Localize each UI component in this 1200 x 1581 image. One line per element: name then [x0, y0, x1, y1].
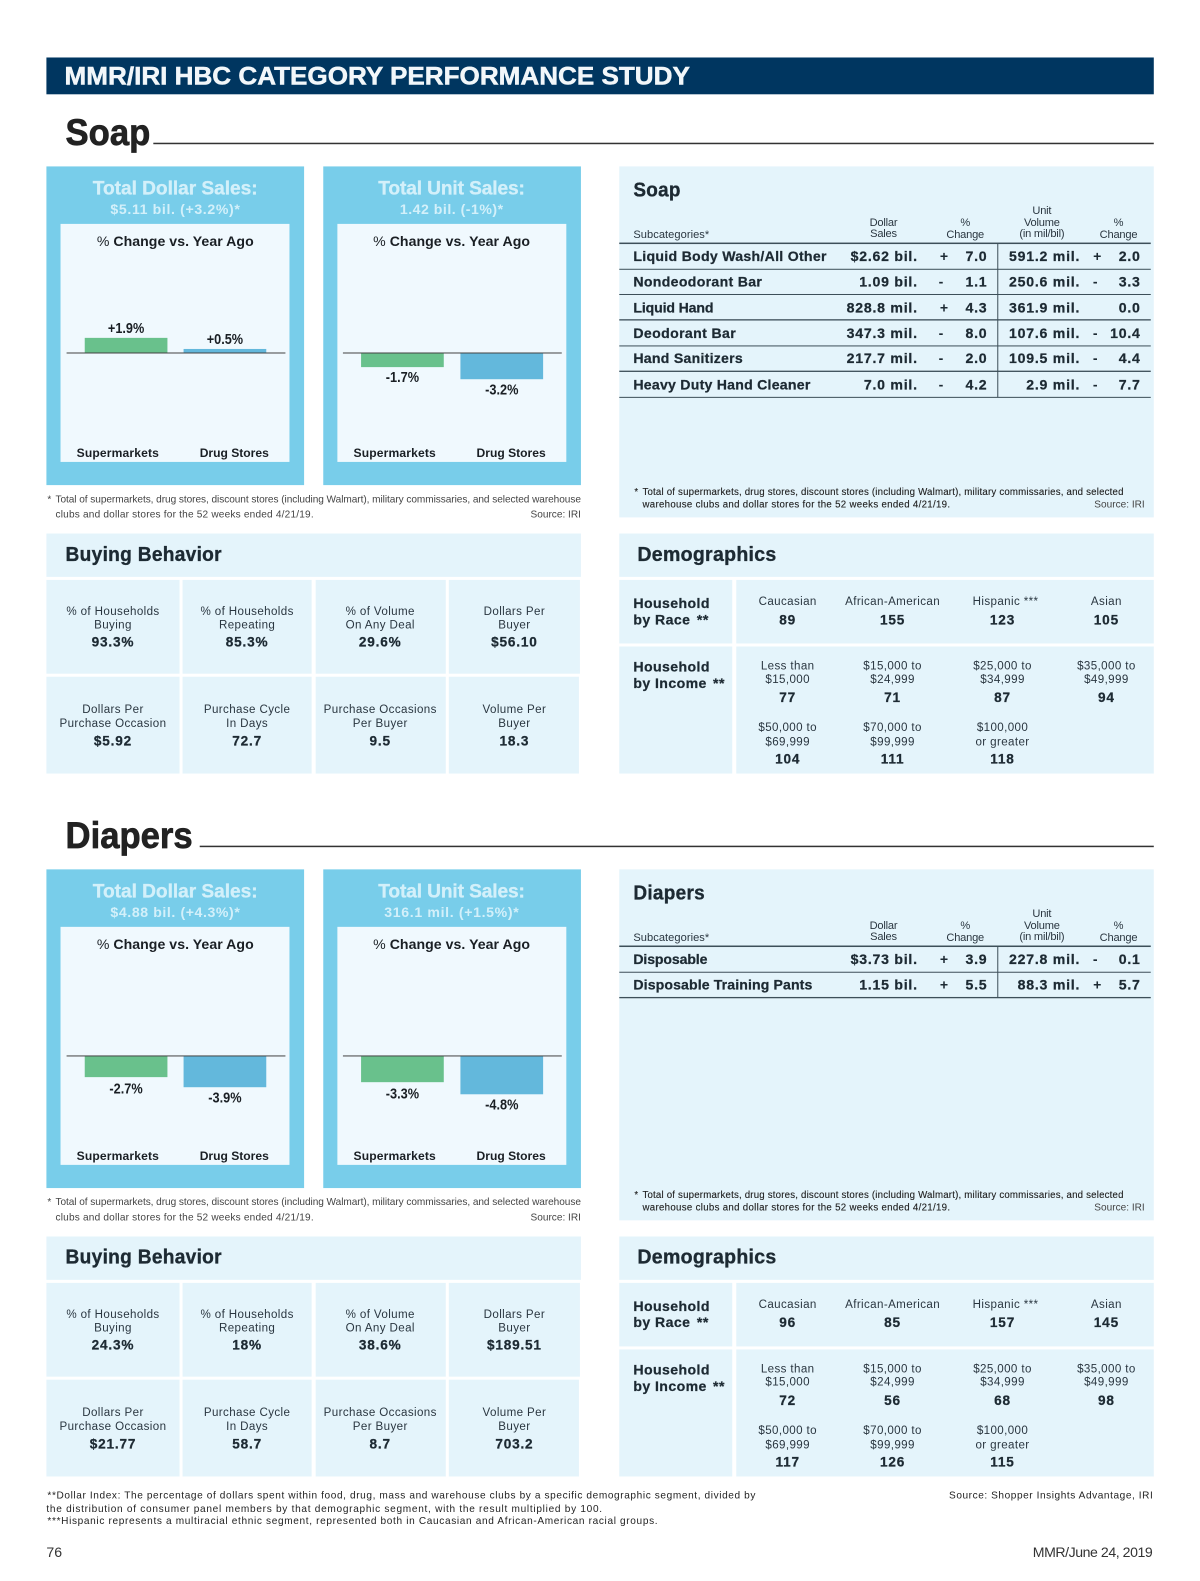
table column headers: % — [1114, 920, 1124, 932]
table column headers: Dollar — [870, 217, 898, 229]
metric cells: Per Buyer — [353, 1421, 408, 1433]
subheading: diapers unit sales value: 316.1 mil. (+1.5%)* — [384, 904, 519, 920]
bar chart: soap dollar sales: +0.5% — [207, 331, 244, 348]
table column headers: Sales — [870, 931, 898, 943]
household by income: 71 — [884, 690, 901, 705]
footnote: soap sales: Total of supermarkets, drug stores, discount stores (including Walmart), military commissaries, and selected warehouse — [55, 494, 581, 505]
household by race: 157 — [990, 1315, 1015, 1330]
household by income: $70,000 to — [863, 1425, 922, 1437]
table rows: 88.3 mil. — [1018, 976, 1080, 992]
household by income: $70,000 to — [863, 722, 922, 734]
metric cells: 29.6% — [359, 634, 402, 649]
table rows: 0.1 — [1119, 951, 1141, 967]
table rows: Disposable Training Pants — [633, 976, 813, 992]
table footnote: Source: IRI — [1094, 499, 1145, 510]
heading: total unit sales: Total Unit Sales: — [378, 179, 525, 200]
household by income: 98 — [1098, 1393, 1115, 1408]
household by income: 56 — [884, 1393, 901, 1408]
metric cells: Buying — [94, 1322, 132, 1334]
panel: soap demographics — [619, 534, 1154, 774]
section title: Soap: Soap — [66, 111, 150, 153]
metric cells: In Days — [226, 1421, 268, 1433]
source credit: Source: Shopper Insights Advantage, IRI — [949, 1491, 1153, 1502]
panel: diapers buying behavior — [46, 1236, 581, 1477]
household by income: $24,999 — [870, 1377, 915, 1389]
heading: total unit sales: Total Unit Sales: — [378, 882, 525, 903]
household by income: or greater — [975, 1439, 1030, 1451]
table rows: 591.2 mil. — [1009, 248, 1080, 264]
table rows: + — [940, 248, 948, 264]
metric cells: % of Volume — [346, 1309, 415, 1321]
household by race — [619, 580, 1154, 643]
household by income: Less than — [761, 661, 815, 673]
table rows: 2.0 — [1119, 248, 1141, 264]
household by income: $49,999 — [1084, 1377, 1129, 1389]
table rows: + — [940, 976, 948, 992]
metric cells: $21.77 — [90, 1436, 136, 1451]
table rows: 10.4 — [1110, 325, 1141, 341]
footnote: soap sales: Source: IRI — [531, 509, 581, 520]
table rows: 1.1 — [965, 273, 987, 289]
table rows: - — [1093, 951, 1098, 967]
metric cells — [46, 1283, 580, 1477]
household by income: 115 — [990, 1454, 1015, 1469]
table rows: 361.9 mil. — [1009, 300, 1080, 316]
page number: 76 — [46, 1544, 62, 1560]
issue date: MMR/June 24, 2019 — [1033, 1544, 1153, 1560]
household by income: $25,000 to — [973, 1364, 1032, 1376]
table column headers: % — [1114, 217, 1124, 229]
table rows: - — [939, 325, 944, 341]
household by income: $49,999 — [1084, 674, 1129, 686]
bar chart: soap unit sales: -3.2% — [485, 381, 519, 398]
metric cells: 24.3% — [92, 1337, 134, 1352]
footnote: diapers sales — [47, 1197, 581, 1223]
metric cells: Volume Per — [483, 704, 546, 716]
metric cells: % of Volume — [346, 606, 415, 618]
household by income: 118 — [990, 751, 1015, 766]
table column headers: (in mil/bil) — [1019, 228, 1064, 240]
table column headers — [633, 908, 1137, 944]
heading: demographics: Demographics — [637, 1247, 777, 1269]
household by race: Asian — [1091, 596, 1122, 608]
panel: diapers total unit sales — [323, 869, 581, 1188]
metric cells: Repeating — [219, 1322, 275, 1334]
table footnote: warehouse clubs and dollar stores for the 52 weeks ended 4/21/19. — [641, 499, 950, 510]
metric cells: 93.3% — [92, 634, 134, 649]
household by income: $25,000 to — [973, 661, 1032, 673]
panel: soap subcategory table — [619, 166, 1154, 517]
household by race: 145 — [1094, 1315, 1119, 1330]
household by race: Hispanic *** — [973, 596, 1039, 608]
panel: soap buying behavior — [46, 534, 581, 774]
heading: buying behavior: Buying Behavior — [66, 1247, 222, 1269]
table rows: 347.3 mil. — [847, 325, 918, 341]
table rows: - — [1093, 350, 1098, 366]
household by race: Hispanic *** — [973, 1299, 1039, 1311]
metric cells: Purchase Cycle — [204, 704, 290, 716]
household by income: $100,000 — [977, 1425, 1028, 1437]
household by income: $69,999 — [765, 736, 810, 748]
table rows: $3.73 bil. — [851, 951, 918, 967]
table rows: 227.8 mil. — [1009, 951, 1080, 967]
heading: demographics: Demographics — [637, 544, 777, 566]
metric cells: 9.5 — [370, 733, 391, 748]
bar chart: soap dollar sales: +1.9% — [108, 320, 145, 337]
metric cells: Buying — [94, 619, 132, 631]
chart title: % Change vs. Year Ago — [373, 233, 531, 249]
table rows: 109.5 mil. — [1009, 350, 1080, 366]
metric cells: 38.6% — [359, 1337, 402, 1352]
household by income: ** — [713, 1378, 725, 1394]
table footnote: Total of supermarkets, drug stores, discount stores (including Walmart), military commissaries, and selected — [642, 487, 1124, 498]
bar chart: diapers dollar sales: Drug Stores — [200, 1149, 269, 1163]
table footnote: Total of supermarkets, drug stores, discount stores (including Walmart), military commissaries, and selected — [642, 1190, 1124, 1201]
table column headers: Volume — [1024, 217, 1060, 229]
household by race: Caucasian — [759, 1299, 817, 1311]
table rows — [619, 243, 1151, 398]
metric cells: 72.7 — [232, 733, 262, 748]
household by race: African-American — [845, 596, 940, 608]
table rows: 4.4 — [1119, 350, 1141, 366]
metric cells: Dollars Per — [82, 704, 144, 716]
table rows — [619, 946, 1151, 998]
household by race: Asian — [1091, 1299, 1122, 1311]
bar chart: diapers unit sales: -4.8% — [485, 1096, 519, 1113]
footnote: diapers sales: clubs and dollar stores for the 52 weeks ended 4/21/19. — [55, 1212, 314, 1223]
household by race: 123 — [990, 612, 1015, 627]
bar chart: soap dollar sales — [67, 320, 285, 460]
metric cells: % of Households — [66, 606, 160, 618]
table rows: 3.3 — [1119, 273, 1141, 289]
table rows: 1.15 bil. — [859, 976, 918, 992]
household by income: $99,999 — [870, 1439, 915, 1451]
household by income — [619, 646, 1154, 774]
metric cells: $189.51 — [487, 1337, 542, 1352]
footnote: soap sales — [47, 494, 581, 520]
table rows: 250.6 mil. — [1009, 273, 1080, 289]
metric cells: 8.7 — [370, 1436, 391, 1451]
table rows: + — [1093, 976, 1101, 992]
footnote: soap sales: * — [47, 494, 51, 505]
table rows: Hand Sanitizers — [633, 350, 743, 366]
household by income: $34,999 — [980, 674, 1025, 686]
household by income: $69,999 — [765, 1439, 810, 1451]
household by income: 111 — [881, 751, 904, 766]
table footnote: * — [634, 1190, 638, 1201]
household by income: Household — [633, 1362, 710, 1378]
table rows: 2.0 — [965, 350, 987, 366]
bar chart: diapers unit sales: -3.3% — [386, 1085, 420, 1102]
household by income: 104 — [775, 751, 800, 766]
metric cells: % of Households — [66, 1309, 160, 1321]
metric cells: 85.3% — [226, 634, 268, 649]
metric cells: Purchase Cycle — [204, 1407, 290, 1419]
bar chart: soap dollar sales: Drug Stores — [200, 446, 269, 460]
table rows: 5.5 — [965, 976, 987, 992]
household by race: 96 — [779, 1315, 796, 1330]
table rows: 4.3 — [965, 300, 987, 316]
heading: total dollar sales: Total Dollar Sales: — [93, 179, 258, 200]
household by income: ** — [713, 675, 725, 691]
table rows: - — [1093, 376, 1098, 392]
table column headers: % — [960, 217, 970, 229]
bar chart: diapers dollar sales: -3.9% — [208, 1089, 242, 1106]
subheading: soap unit sales value: 1.42 bil. (-1%)* — [400, 201, 504, 217]
household by income: 77 — [779, 690, 796, 705]
metric cells: Purchase Occasion — [60, 718, 166, 730]
footnote: diapers sales: * — [47, 1197, 51, 1208]
panel: diapers demographics — [619, 1236, 1154, 1477]
metric cells: $56.10 — [491, 634, 538, 649]
table rows: 107.6 mil. — [1009, 325, 1080, 341]
metric cells: 18.3 — [500, 733, 529, 748]
footnote: diapers sales: Source: IRI — [531, 1212, 581, 1223]
bar chart: soap unit sales: Drug Stores — [477, 446, 546, 460]
panel: soap total dollar sales — [46, 166, 304, 485]
table rows: 8.0 — [965, 325, 987, 341]
bar chart: soap dollar sales: Supermarkets — [77, 446, 159, 460]
household by income: 117 — [775, 1454, 800, 1469]
table rows: + — [940, 300, 948, 316]
section title: Diapers: Diapers — [66, 814, 193, 856]
table rows: 217.7 mil. — [847, 350, 918, 366]
metric cells: Dollars Per — [484, 606, 545, 618]
household by race: 85 — [884, 1315, 901, 1330]
household by income: $99,999 — [870, 736, 915, 748]
metric cells: % of Households — [200, 1309, 294, 1321]
bar chart: diapers unit sales: Supermarkets — [354, 1149, 436, 1163]
table rows: - — [1093, 325, 1098, 341]
household by income: $24,999 — [870, 674, 915, 686]
table rows: Disposable — [633, 951, 708, 967]
bar chart: soap unit sales: Supermarkets — [354, 446, 436, 460]
table rows: + — [940, 951, 948, 967]
household by income: $15,000 — [765, 674, 810, 686]
household by income: $35,000 to — [1077, 661, 1136, 673]
table rows: 7.7 — [1119, 376, 1141, 392]
metric cells: 58.7 — [232, 1436, 262, 1451]
household by race: ** — [697, 1314, 709, 1330]
household by income: 68 — [994, 1393, 1011, 1408]
household by income — [619, 1349, 1154, 1477]
household by race: by Race — [633, 611, 690, 627]
metric cells: In Days — [226, 718, 268, 730]
table rows: 5.7 — [1119, 976, 1141, 992]
household by income: $100,000 — [977, 722, 1028, 734]
table footnote — [634, 1190, 1145, 1213]
subheading: diapers dollar sales value: $4.88 bil. (+4.3%)* — [110, 904, 241, 920]
metric cells: On Any Deal — [346, 1322, 415, 1334]
metric cells: Volume Per — [483, 1407, 546, 1419]
household by income: $15,000 to — [863, 1364, 922, 1376]
table rows: $2.62 bil. — [851, 248, 918, 264]
household by race: Caucasian — [759, 596, 817, 608]
chart title: % Change vs. Year Ago — [97, 233, 254, 249]
table rows: Heavy Duty Hand Cleaner — [633, 376, 811, 392]
household by income: 72 — [779, 1393, 796, 1408]
metric cells: Purchase Occasion — [60, 1421, 166, 1433]
panel: diapers subcategory table — [619, 869, 1154, 1220]
metric cells: Per Buyer — [353, 718, 408, 730]
bar chart: diapers dollar sales: -2.7% — [109, 1080, 143, 1097]
table rows: 0.0 — [1119, 300, 1141, 316]
household by income: by Income — [633, 675, 707, 691]
table column headers: Change — [946, 229, 984, 241]
household by income: $15,000 to — [863, 661, 922, 673]
household by income: $15,000 — [765, 1377, 810, 1389]
table rows: Deodorant Bar — [633, 325, 736, 341]
household by income: 126 — [880, 1454, 905, 1469]
table rows: - — [939, 273, 944, 289]
household by race — [619, 1283, 1154, 1346]
bottom footnotes: ***Hispanic represents a multiracial ethnic segment, represented both in Caucasian and African-American racial groups. — [47, 1516, 658, 1527]
table footnote: * — [634, 487, 638, 498]
table rows: 7.0 — [965, 248, 987, 264]
chart title: % Change vs. Year Ago — [97, 936, 254, 952]
metric cells: Dollars Per — [82, 1407, 144, 1419]
bottom footnotes: **Dollar Index: The percentage of dollars spent within food, drug, mass and warehouse clubs by a specific demographic segment, divided by — [47, 1491, 756, 1502]
header banner: MMR/IRI HBC CATEGORY PERFORMANCE STUDY — [65, 63, 690, 91]
header banner — [46, 57, 1154, 94]
table heading: Soap — [633, 180, 681, 202]
household by race: 155 — [880, 612, 905, 627]
table rows: 2.9 mil. — [1026, 376, 1080, 392]
metric cells: 18% — [232, 1337, 262, 1352]
table column headers: Unit — [1032, 908, 1051, 920]
table column headers: Unit — [1032, 205, 1051, 217]
table column headers: % — [960, 920, 970, 932]
household by income: $35,000 to — [1077, 1364, 1136, 1376]
footnote: diapers sales: Total of supermarkets, drug stores, discount stores (including Walmart), military commissaries, and selected warehouse — [55, 1197, 581, 1208]
table rows: 828.8 mil. — [847, 300, 918, 316]
household by race: African-American — [845, 1299, 940, 1311]
table footnote: Source: IRI — [1094, 1202, 1145, 1213]
table heading: Diapers — [633, 883, 705, 905]
table column headers: Volume — [1024, 920, 1060, 932]
table rows: + — [1093, 248, 1101, 264]
table column headers: Dollar — [870, 920, 898, 932]
household by income: or greater — [975, 736, 1030, 748]
table rows: Liquid Body Wash/All Other — [633, 248, 827, 264]
table rows: 7.0 mil. — [864, 376, 918, 392]
table column headers: Change — [1100, 229, 1137, 241]
bar chart: diapers unit sales — [343, 1055, 562, 1163]
bar chart: soap unit sales: -1.7% — [386, 369, 420, 386]
table column headers: Change — [946, 932, 984, 944]
table rows: 4.2 — [965, 376, 987, 392]
panel: soap total unit sales — [323, 166, 581, 485]
household by income: 94 — [1098, 690, 1115, 705]
table rows: 3.9 — [965, 951, 987, 967]
table column headers: Sales — [870, 228, 898, 240]
household by race: Household — [633, 1298, 710, 1314]
metric cells: Dollars Per — [484, 1309, 545, 1321]
household by income: Household — [633, 659, 710, 675]
household by income: $50,000 to — [758, 1425, 817, 1437]
panel: diapers total dollar sales — [46, 869, 304, 1188]
heading: buying behavior: Buying Behavior — [66, 544, 222, 566]
metric cells: Buyer — [498, 1421, 530, 1433]
table column headers: (in mil/bil) — [1019, 931, 1064, 943]
household by race: by Race — [633, 1314, 690, 1330]
bar chart: diapers unit sales: Drug Stores — [477, 1149, 546, 1163]
heading: total dollar sales: Total Dollar Sales: — [93, 882, 258, 903]
table column headers — [633, 205, 1137, 241]
bar chart: diapers dollar sales — [67, 1055, 285, 1163]
metric cells: Purchase Occasions — [324, 704, 437, 716]
footnote: soap sales: clubs and dollar stores for the 52 weeks ended 4/21/19. — [55, 509, 314, 520]
table rows: - — [1093, 273, 1098, 289]
metric cells: % of Households — [200, 606, 294, 618]
metric cells: Buyer — [498, 619, 530, 631]
bottom footnotes: the distribution of consumer panel members by that demographic segment, with the result multiplied by 100. — [46, 1504, 602, 1515]
table rows: 1.09 bil. — [859, 273, 918, 289]
household by income: 87 — [994, 690, 1011, 705]
table rows: Nondeodorant Bar — [633, 273, 762, 289]
metric cells: $5.92 — [94, 733, 132, 748]
table column headers: Subcategories* — [633, 229, 710, 241]
chart title: % Change vs. Year Ago — [373, 936, 531, 952]
metric cells: Repeating — [219, 619, 275, 631]
metric cells: On Any Deal — [346, 619, 415, 631]
table column headers: Subcategories* — [633, 932, 710, 944]
household by race: Household — [633, 595, 710, 611]
household by race: ** — [697, 611, 709, 627]
household by income: by Income — [633, 1378, 707, 1394]
table rows: Liquid Hand — [633, 300, 714, 316]
metric cells: Purchase Occasions — [324, 1407, 437, 1419]
household by income: Less than — [761, 1364, 815, 1376]
household by income: $50,000 to — [758, 722, 817, 734]
table column headers: Change — [1100, 932, 1137, 944]
bar chart: diapers dollar sales: Supermarkets — [77, 1149, 159, 1163]
metric cells: Buyer — [498, 718, 530, 730]
metric cells — [46, 580, 580, 774]
household by income: $34,999 — [980, 1377, 1025, 1389]
metric cells: Buyer — [498, 1322, 530, 1334]
table rows: - — [939, 350, 944, 366]
bar chart: soap unit sales — [343, 352, 562, 460]
household by race: 105 — [1094, 612, 1119, 627]
table rows: - — [939, 376, 944, 392]
household by race: 89 — [779, 612, 796, 627]
table footnote: warehouse clubs and dollar stores for the 52 weeks ended 4/21/19. — [641, 1202, 950, 1213]
bottom footnotes — [46, 1491, 756, 1527]
subheading: soap dollar sales value: $5.11 bil. (+3.2%)* — [110, 201, 241, 217]
table footnote — [634, 487, 1145, 510]
metric cells: 703.2 — [495, 1436, 533, 1451]
